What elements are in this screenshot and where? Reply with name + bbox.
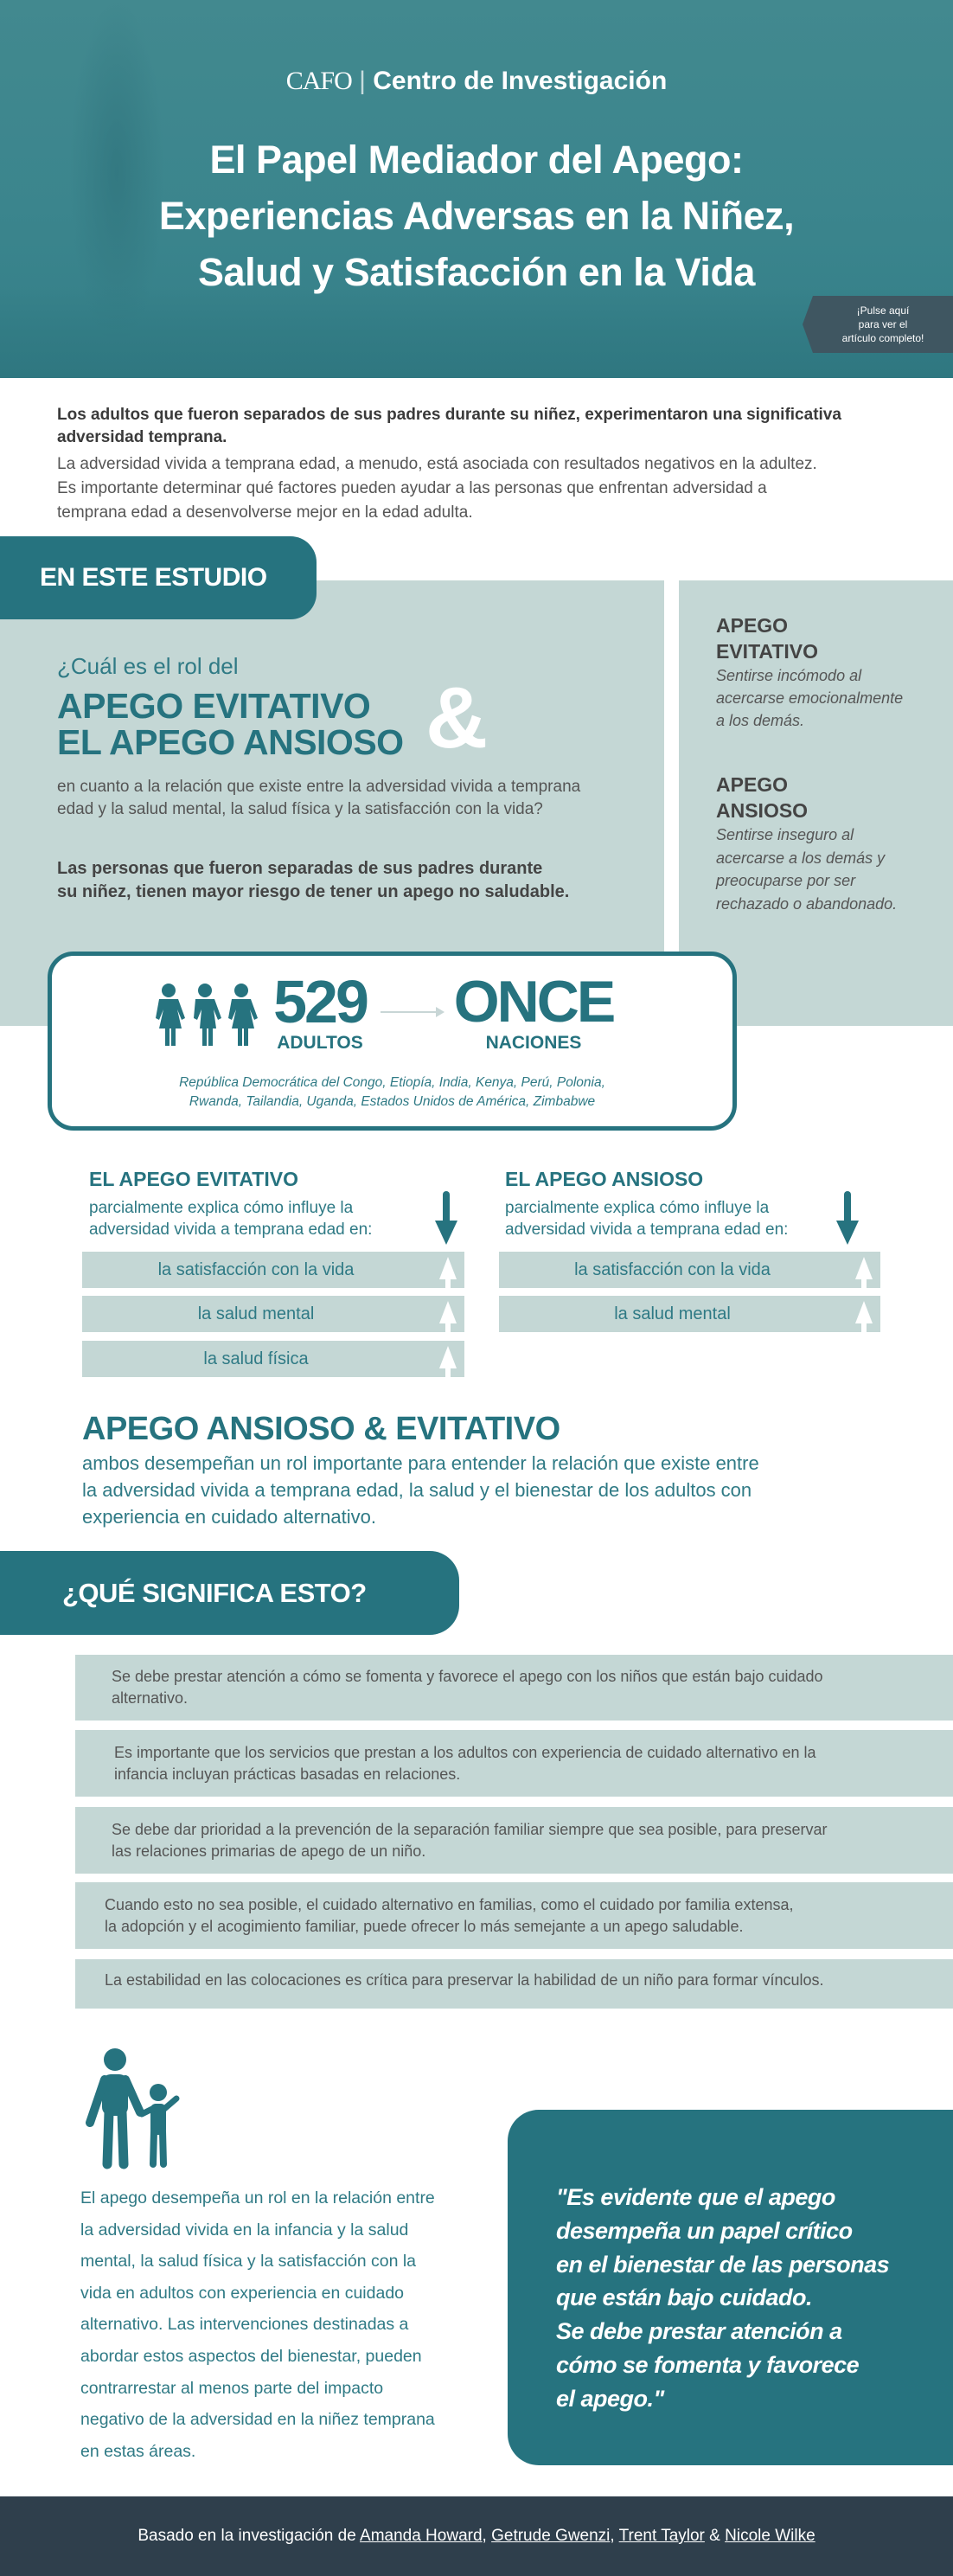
item 3: Se debe dar prioridad a la prevención de la separación familiar siempre que sea posible, para preservar [112,1821,827,1838]
text: summary: la adversidad vivida en la infancia y la salud [80,2220,408,2240]
subtext: parcialmente explica cómo influye la [505,1199,769,1217]
text: summary: abordar estos aspectos del bienestar, pueden [80,2347,422,2366]
definition: ansioso [716,773,897,912]
panel: evitativo results [82,1168,464,1377]
heading: APEGO ANSIOSO & EVITATIVO [82,1411,560,1447]
link tab [803,296,953,353]
callout: quote: Se debe prestar atención a [556,2318,842,2344]
callout: quote: que están bajo cuidado. [556,2284,812,2310]
item 5: La estabilidad en las colocaciones es crítica para preservar la habilidad de un niño para formar vínculos. [105,1971,823,1989]
intro text: Los adultos que fueron separados de sus padres durante su niñez, experimentaron una significativa adversidad temprana. [57,406,841,446]
callout: quote: en el bienestar de las personas [556,2252,889,2278]
subtext: adversidad vivida a temprana edad en: [505,1221,788,1239]
definition: ansioso: preocuparse por ser [716,872,855,889]
down arrow [836,1191,859,1245]
title [159,138,794,294]
question body: edad y la salud mental, la salud física y la satisfacción con la vida? [57,800,543,818]
stat: once naciones: NACIONES [486,1033,581,1053]
definition: ansioso: Sentirse inseguro al [716,826,854,843]
callout: quote: desempeña un papel crítico [556,2218,853,2244]
item 2 [75,1730,953,1797]
title: Experiencias Adversas en la Niñez, [159,194,794,238]
stat: 529 adultos: ADULTOS [277,1033,363,1053]
icon: three people [156,984,258,1046]
country list: Rwanda, Tailandia, Uganda, Estados Unidos de América, Zimbabwe [189,1094,595,1109]
country list: República Democrática del Congo, Etiopía, India, Kenya, Perú, Polonia, [179,1075,605,1090]
text: summary: en estas áreas. [80,2442,195,2461]
title: El Papel Mediador del Apego: [210,138,743,182]
risk statement [57,859,569,901]
definition: ansioso: ANSIOSO [716,799,808,822]
bar: salud mental: la salud mental [198,1304,314,1323]
bar: satisfaccion: la satisfacción con la vida [574,1260,771,1279]
definition: evitativo: EVITATIVO [716,640,818,663]
tab: QUE SIGNIFICA ESTO: ¿QUÉ SIGNIFICA ESTO? [62,1578,367,1608]
item 4: Cuando esto no sea posible, el cuidado alternativo en familias, como el cuidado por familia extensa, [105,1896,793,1913]
item 2: Es importante que los servicios que prestan a los adultos con experiencia de cuidado alternativo en la [114,1744,816,1761]
body: experiencia en cuidado alternativo. [82,1506,376,1528]
intro text: Es importante determinar qué factores pueden ayudar a las personas que enfrentan adversidad a [57,479,767,497]
subtext [505,1199,788,1239]
item 4: la adopción y el acogimiento familiar, puede ofrecer lo más semejante a un apego saludable. [105,1918,743,1935]
title: Salud y Satisfacción en la Vida [198,250,755,294]
item 3 [75,1807,953,1874]
definition: ansioso: APEGO [716,773,788,796]
tab: EN ESTE ESTUDIO: EN ESTE ESTUDIO [40,563,267,592]
item 1 [75,1655,953,1721]
definition: evitativo: APEGO [716,614,788,637]
body [82,1452,759,1528]
tab: EN ESTE ESTUDIO [0,536,317,619]
question intro: ¿Cuál es el rol del [57,653,239,679]
subtext [89,1199,372,1239]
definition: evitativo [716,614,903,729]
bar: salud mental [499,1296,880,1332]
definition: evitativo: a los demás. [716,712,804,729]
definition: evitativo: Sentirse incómodo al [716,667,861,684]
subtext: parcialmente explica cómo influye la [89,1199,353,1217]
item 5 [75,1959,953,2009]
item 4 [75,1882,953,1949]
question body: en cuanto a la relación que existe entre la adversidad vivida a temprana [57,778,580,796]
bar: salud mental [82,1296,464,1332]
bar: satisfaccion [499,1252,880,1288]
item 2: infancia incluyan prácticas basadas en relaciones. [114,1765,460,1783]
link tab: ¡Pulse aquí [857,304,909,317]
text: summary: vida en adultos con experiencia en cuidado [80,2284,404,2303]
text: summary [80,2188,435,2461]
panel: study question [0,580,664,1026]
definition: ansioso: acercarse a los demás y [716,849,885,867]
text: summary: mental, la salud física y la satisfacción con la [80,2252,416,2271]
text: summary: El apego desempeña un rol en la relación entre [80,2188,435,2208]
heading: attachment types: APEGO EVITATIVO [57,686,370,726]
text: summary: alternativo. Las intervenciones destinadas a [80,2315,408,2334]
heading: EL APEGO EVITATIVO [89,1168,298,1190]
text: summary: contrarrestar al menos parte del impacto [80,2379,383,2398]
footer: Basado en la investigación de Amanda Howard, Getrude Gwenzi, Trent Taylor & Nicole Wilke [138,2527,815,2545]
panel: definitions [679,580,953,1026]
down arrow [435,1191,457,1245]
callout: quote: "Es evidente que el apego [556,2184,835,2210]
icon: parent and child [86,2048,180,2169]
subtext: adversidad vivida a temprana edad en: [89,1221,372,1239]
bar: salud fisica: la salud física [203,1349,309,1368]
link tab: para ver el [859,318,907,330]
item 3: las relaciones primarias de apego de un niño. [112,1842,425,1860]
callout: quote [508,2110,953,2465]
definition: evitativo: acercarse emocionalmente [716,689,903,707]
arrow [381,1007,445,1017]
link tab: artículo completo! [842,332,924,344]
body: la adversidad vivida a temprana edad, la salud y el bienestar de los adultos con [82,1479,752,1501]
text: summary: negativo de la adversidad en la niñez temprana [80,2410,435,2429]
body: ambos desempeñan un rol importante para entender la relación que existe entre [82,1452,759,1474]
item 1: Se debe prestar atención a cómo se fomenta y favorece el apego con los niños que están bajo cuidado [112,1668,823,1685]
callout: quote: el apego." [556,2386,664,2412]
heading: EL APEGO ANSIOSO [505,1168,703,1190]
header banner [0,0,953,378]
bar: salud mental: la salud mental [614,1304,731,1323]
intro text: temprana edad a desenvolverse mejor en la edad adulta. [57,503,473,522]
footer [0,2496,953,2576]
callout: quote: cómo se fomenta y favorece [556,2352,859,2378]
heading: attachment types: EL APEGO ANSIOSO [57,722,404,762]
risk statement: su niñez, tienen mayor riesgo de tener un apego no saludable. [57,882,569,901]
heading: attachment types [57,686,404,762]
definition: ansioso: rechazado o abandonado. [716,894,897,912]
item 1: alternativo. [112,1689,188,1707]
country list [179,1075,605,1109]
combined finding [82,1411,759,1528]
bar: satisfaccion [82,1252,464,1288]
stats box [48,952,737,1131]
risk statement: Las personas que fueron separadas de sus padres durante [57,859,542,878]
implications list [75,1655,953,2009]
panel: ansioso results [499,1168,880,1332]
bar: satisfaccion: la satisfacción con la vida [158,1260,354,1279]
intro text [57,406,842,522]
stat: 529 adultos: 529 [273,968,367,1035]
stat: once naciones: ONCE [454,969,613,1035]
ampersand: & [425,670,488,766]
question body [57,778,581,818]
decorative photo silhouettes [69,0,164,346]
bar: salud fisica [82,1341,464,1377]
intro text: La adversidad vivida a temprana edad, a menudo, está asociada con resultados negativos en la adultez. [57,455,817,473]
tab: QUE SIGNIFICA ESTO [0,1551,459,1635]
logo line: CAFO | Centro de Investigación [286,67,667,95]
